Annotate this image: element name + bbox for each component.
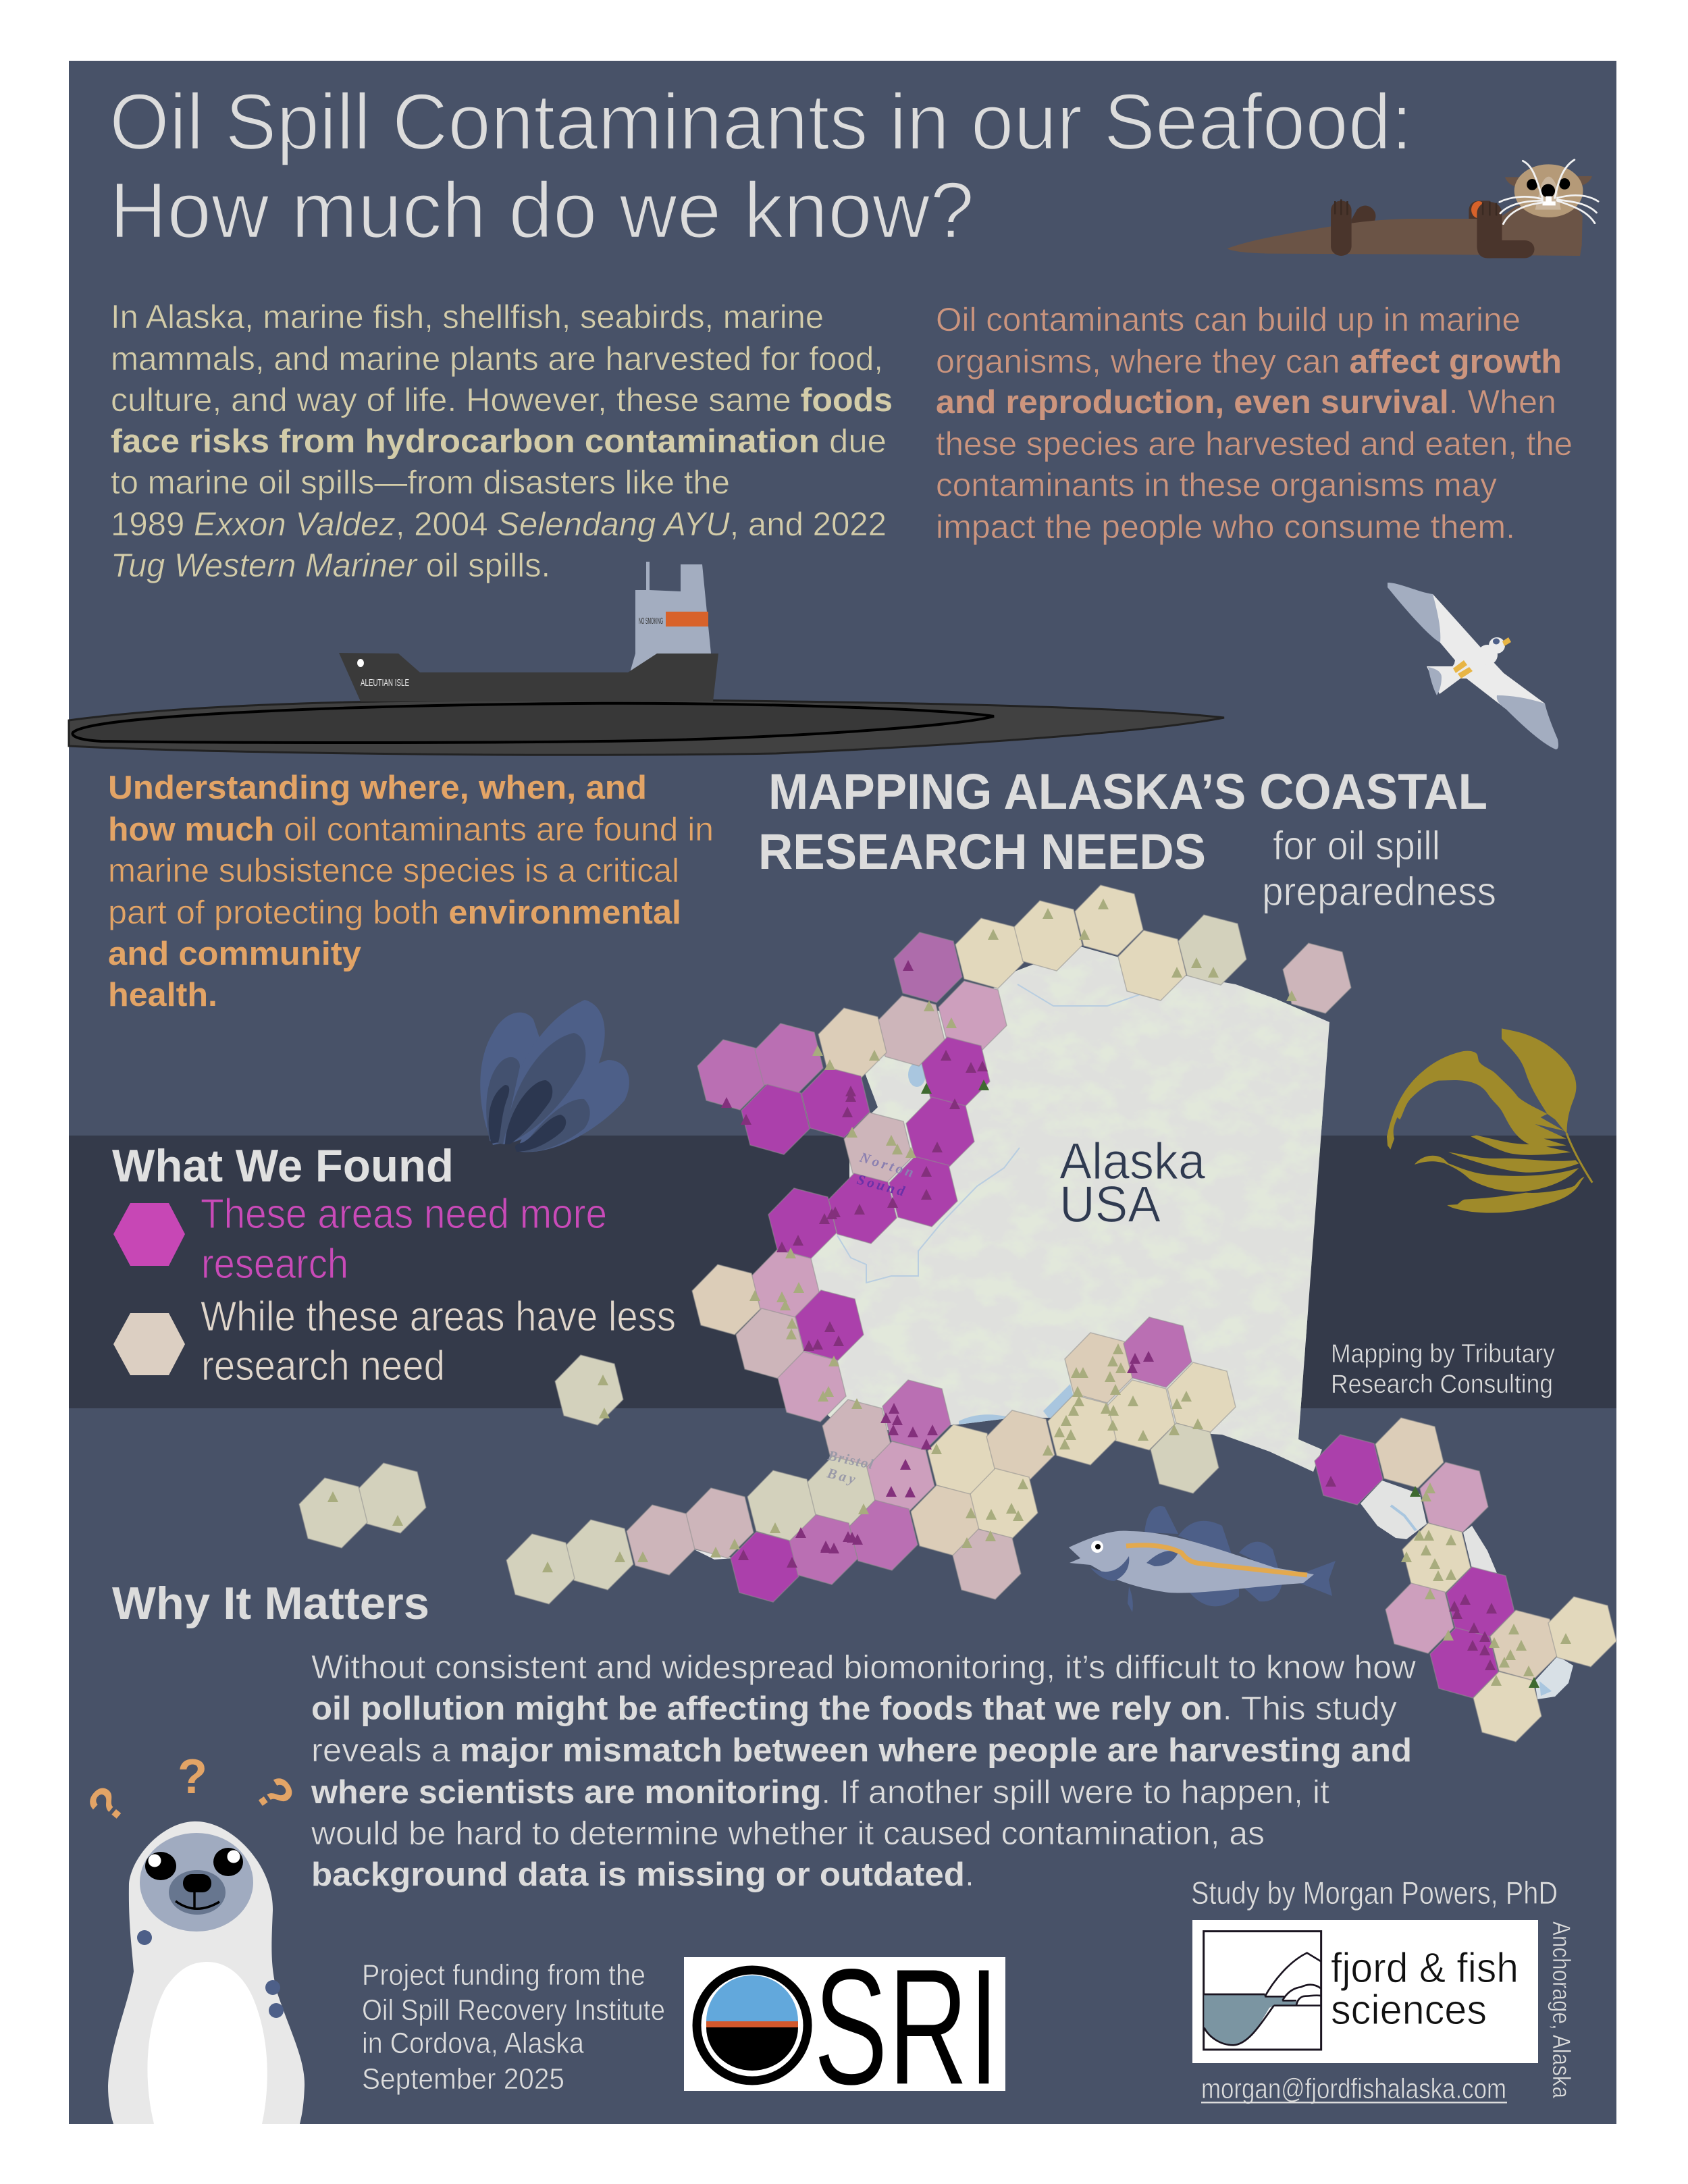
text block: intro left — [111, 299, 893, 584]
icon: fish — [1069, 1506, 1336, 1612]
map labels: water bodies — [825, 1149, 916, 1487]
text: email: morgan@fjordfishalaska.com — [1201, 2073, 1506, 2104]
legend: more research — [113, 1191, 607, 1287]
text block: why it matters: oil pollution might be affecting the foods that we rely on . This study — [311, 1690, 1398, 1727]
text block: funding: Oil Spill Recovery Institute — [362, 1994, 665, 2027]
map: hexagon grid — [299, 885, 1616, 1742]
text block: funding: Project funding from the — [362, 1959, 645, 1992]
title: Oil Spill Contaminants in our Seafood: — [109, 78, 1413, 167]
icon: mussels — [480, 1000, 629, 1152]
text block: intro right: and reproduction, even survival . When — [936, 384, 1556, 421]
legend: less research: research need — [201, 1343, 445, 1389]
legend: less research — [113, 1294, 676, 1389]
map label: Alaska USA: Alaska — [1059, 1133, 1206, 1190]
logo: fjord & fish sciences: sciences — [1331, 1987, 1487, 2033]
heading: mapping: RESEARCH NEEDS — [758, 824, 1206, 880]
heading: what we found: What We Found — [112, 1140, 454, 1192]
subheading: for oil spill preparedness: preparedness — [1262, 869, 1496, 914]
legend: less research: While these areas have less — [201, 1294, 676, 1340]
logo: OSRI — [684, 1934, 1005, 2120]
text block: intro right: contaminants in these organisms may — [936, 467, 1498, 504]
title: How much do we know? — [109, 166, 974, 255]
map labels: water bodies: Bristol — [826, 1447, 875, 1472]
text block: understanding: part of protecting both environmental — [108, 895, 681, 931]
text block: intro left: face risks from hydrocarbon contamination due — [111, 423, 887, 460]
text block: intro left: to marine oil spills—from disasters like the — [111, 464, 730, 501]
heading: mapping: MAPPING ALASKA’S COASTAL — [768, 764, 1487, 820]
map labels: water bodies: Norton — [858, 1149, 916, 1181]
text: Anchorage, Alaska: Anchorage, Alaska — [1548, 1921, 1575, 2098]
credit: mapping: Research Consulting — [1331, 1370, 1553, 1399]
subheading: for oil spill preparedness: for oil spill — [1273, 823, 1440, 868]
logo: fjord & fish sciences: fjord & fish — [1331, 1945, 1519, 1992]
credit: mapping — [1331, 1339, 1555, 1399]
map label: Alaska USA — [1059, 1133, 1206, 1233]
text block: intro right: these species are harvested and eaten, the — [936, 426, 1573, 462]
legend: more research: research — [201, 1241, 348, 1287]
text block: why it matters: would be hard to determine whether it caused contamination, as — [311, 1815, 1265, 1852]
subheading: for oil spill preparedness — [1262, 823, 1496, 914]
text block: funding: in Cordova, Alaska — [362, 2027, 584, 2060]
logo: OSRI: SRI — [814, 1934, 999, 2120]
text block: intro left: In Alaska, marine fish, shellfish, seabirds, marine — [111, 299, 824, 336]
icon: oil slick — [69, 700, 1224, 755]
map labels: water bodies: Sound — [855, 1171, 907, 1200]
legend: more research: These areas need more — [201, 1191, 607, 1237]
credit: study by: Study by Morgan Powers, PhD — [1191, 1875, 1558, 1911]
text block: intro left: mammals, and marine plants are harvested for food, — [111, 341, 883, 377]
dark band: what we found — [69, 1136, 1616, 1408]
icon: seal with question marks: ? — [178, 1750, 207, 1804]
text block: intro left: Tug Western Mariner oil spills. — [111, 548, 550, 584]
icon: seagull — [1388, 583, 1558, 749]
text block: funding — [362, 1959, 665, 2096]
icon: ship: ALEUTIAN ISLE — [361, 677, 409, 689]
title — [109, 78, 1413, 255]
icon: seal with question marks: ? — [77, 1776, 137, 1834]
text block: intro right: organisms, where they can affect growth — [936, 344, 1562, 380]
icon: seal with question marks: ? — [244, 1767, 305, 1822]
text block: intro left: 1989 Exxon Valdez, 2004 Selendang AYU, and 2022 — [111, 506, 887, 543]
map: Alaska land — [694, 932, 1573, 1699]
text block: why it matters: background data is missing or outdated . — [311, 1857, 974, 1893]
text block: understanding — [108, 770, 714, 1013]
text block: intro left: culture, and way of life. However, these same foods — [111, 382, 893, 419]
map label: Alaska USA: USA — [1059, 1176, 1161, 1233]
map labels: water bodies: Bay — [825, 1464, 858, 1487]
text block: why it matters — [311, 1649, 1417, 1893]
text block: intro right: Oil contaminants can build up in marine — [936, 302, 1521, 338]
text block: intro right — [936, 302, 1573, 545]
icon: seal with question marks — [77, 1750, 305, 2124]
icon: kelp — [1387, 1028, 1592, 1213]
text block: why it matters: reveals a major mismatch between where people are harvesting and — [311, 1732, 1412, 1769]
heading: why it matters: Why It Matters — [112, 1578, 429, 1629]
text block: understanding: and community — [108, 936, 361, 972]
heading: mapping — [758, 764, 1487, 880]
credit: mapping: Mapping by Tributary — [1331, 1339, 1555, 1368]
text block: understanding: health. — [108, 977, 217, 1013]
text block: understanding: how much oil contaminants are found in — [108, 811, 714, 848]
text block: funding: September 2025 — [362, 2062, 564, 2096]
text block: understanding: Understanding where, when, and — [108, 770, 647, 806]
logo: fjord & fish sciences — [1192, 1920, 1538, 2063]
text block: why it matters: where scientists are monitoring . If another spill were to happen, it — [311, 1774, 1329, 1811]
icon: ship — [339, 562, 718, 701]
text block: intro right: impact the people who consume them. — [936, 509, 1515, 545]
icon: ship: NO SMOKING — [639, 616, 663, 626]
map: sampling triangles — [327, 899, 1571, 1688]
icon: sea otter — [1227, 160, 1598, 258]
text block: understanding: marine subsistence species is a critical — [108, 853, 679, 889]
text block: why it matters: Without consistent and widespread biomonitoring, it’s difficult to know how — [311, 1649, 1417, 1686]
